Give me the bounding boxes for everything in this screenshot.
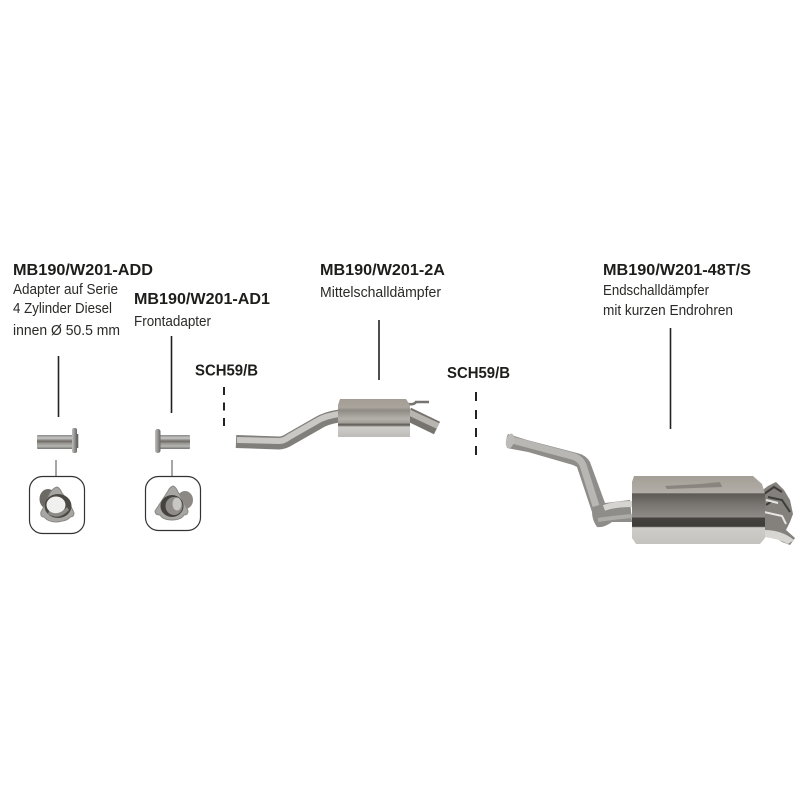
connector line: AD1 adapter to detail [171, 460, 173, 476]
heading: MB190/W201-ADD adapter label: innen Ø 50.5 mm [13, 322, 120, 339]
leader line: AD1 adapter [170, 336, 172, 413]
heading: MB190/W201-ADD adapter label: MB190/W201-ADD [13, 262, 153, 279]
heading: MB190/W201-48T/S rear silencer label: MB190/W201-48T/S [603, 262, 751, 279]
leader line: rear silencer [670, 328, 672, 429]
icon: AD1 flange detail [146, 476, 200, 530]
part: rear silencer with pipes and tailpipes [505, 433, 795, 545]
heading: MB190/W201-2A centre silencer label [320, 262, 445, 301]
leader line: centre silencer [378, 320, 380, 380]
label: SCH59/B left clamp: SCH59/B [195, 362, 258, 380]
part: AD1 adapter side view [155, 429, 190, 453]
connector line: ADD adapter to detail [55, 460, 57, 476]
heading: MB190/W201-48T/S rear silencer label [603, 262, 751, 319]
heading: MB190/W201-48T/S rear silencer label: mit kurzen Endrohren [603, 302, 733, 319]
heading: MB190/W201-ADD adapter label [13, 262, 153, 339]
leader line: ADD adapter [58, 356, 60, 417]
heading: MB190/W201-ADD adapter label: 4 Zylinder Diesel [13, 300, 112, 317]
heading: MB190/W201-ADD adapter label: Adapter auf Serie [13, 281, 118, 298]
dashed connector: left clamp [223, 387, 225, 427]
dashed connector: right clamp [475, 392, 477, 455]
label: SCH59/B right clamp: SCH59/B [447, 365, 510, 382]
heading: MB190/W201-2A centre silencer label: Mittelschalldämpfer [320, 284, 441, 301]
icon: ADD flange detail [30, 476, 84, 534]
heading: MB190/W201-AD1 front adapter label [134, 291, 270, 330]
part: ADD adapter side view [37, 428, 78, 453]
part: centre silencer with pipes [236, 399, 438, 443]
heading: MB190/W201-AD1 front adapter label: Frontadapter [134, 313, 211, 330]
heading: MB190/W201-2A centre silencer label: MB190/W201-2A [320, 262, 445, 279]
heading: MB190/W201-48T/S rear silencer label: Endschalldämpfer [603, 282, 709, 299]
heading: MB190/W201-AD1 front adapter label: MB190/W201-AD1 [134, 291, 270, 308]
